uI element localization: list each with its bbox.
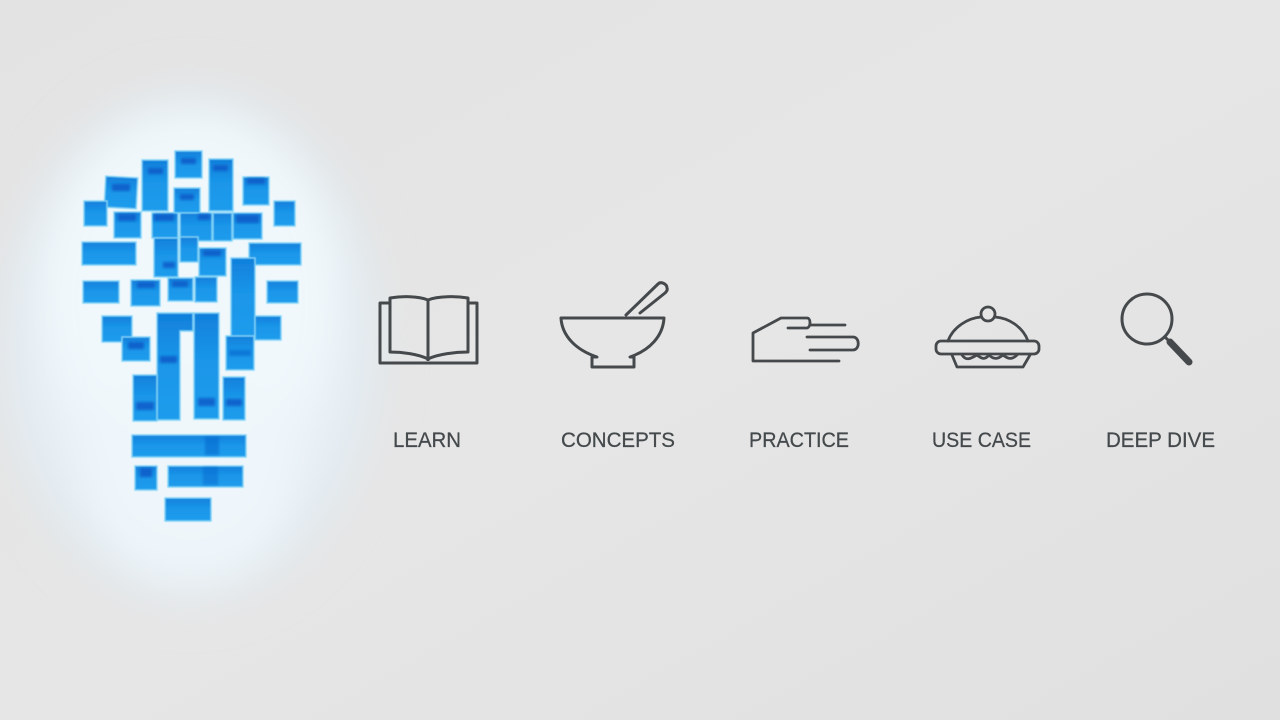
icon: hand	[753, 318, 858, 361]
icon: open book	[380, 297, 477, 363]
icon: magnifying glass	[1122, 294, 1189, 362]
label: use case: USE CASE	[932, 429, 1031, 452]
label: learn: LEARN	[393, 429, 461, 452]
icon: covered pie dish	[936, 307, 1039, 367]
light bulb glow	[0, 70, 395, 620]
block shading	[112, 158, 265, 485]
label: concepts: CONCEPTS	[561, 429, 675, 452]
label: deep dive: DEEP DIVE	[1106, 429, 1215, 452]
icon: bowl and spoon	[561, 283, 667, 367]
label: practice: PRACTICE	[749, 429, 849, 452]
light bulb made of blue blocks	[82, 151, 301, 521]
